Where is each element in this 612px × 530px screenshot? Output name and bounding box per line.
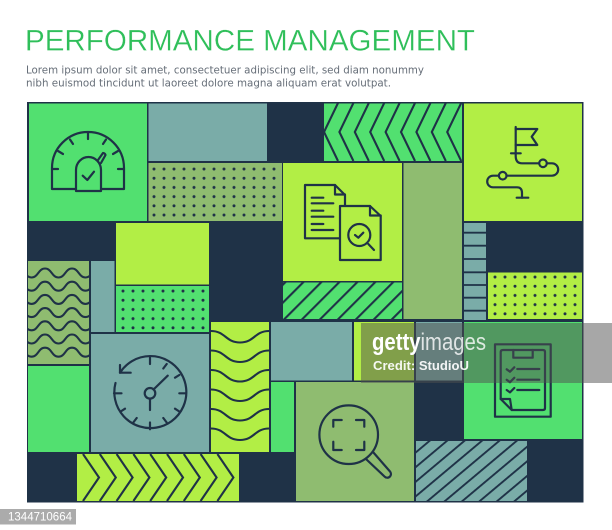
panel: teal small tile [416, 322, 462, 380]
panel: documents tile [283, 163, 402, 281]
subtitle text block [26, 64, 424, 90]
panel: mosaic background [27, 102, 584, 502]
subtitle text block: Lorem ipsum dolor sit amet, consectetuer adipiscing elit, sed diam nonummy [26, 64, 424, 76]
subtitle text block: nibh euismod tincidunt ut laoreet dolore magna aliquam erat volutpat. [26, 78, 391, 90]
panel: lime dotted tile [488, 272, 582, 319]
panel: teal narrow tile [91, 261, 114, 332]
image id label: 1344710664 [8, 512, 73, 524]
panel: teal middle tile [271, 322, 352, 380]
panel: teal striped tile [416, 441, 527, 501]
panel: green chevron tile [324, 103, 462, 161]
icon: clock with counter-clockwise arrow [114, 356, 186, 429]
panel: lime plain tile [116, 223, 209, 284]
title: PERFORMANCE MANAGEMENT [25, 24, 475, 58]
panel: clipboard tile [464, 322, 582, 439]
watermark credit: Credit: StudioU [373, 358, 469, 373]
icon: flag and route [487, 127, 558, 198]
panel: gauge tile [29, 104, 147, 221]
panel: magnifier tile [296, 382, 414, 501]
panel: lime chevron tile [77, 454, 239, 501]
panel: dotted olive tile [148, 163, 282, 221]
panel: roadmap flag tile [464, 104, 582, 221]
panel: green striped tile [283, 282, 402, 319]
panel: green lower-left tile [28, 366, 89, 452]
panel: lime small tile [354, 322, 414, 380]
panel: teal ladder tile [464, 223, 486, 320]
icon: magnifier with focus corners [319, 405, 391, 478]
icon: speedometer gauge [52, 132, 124, 191]
panel: green small tile [271, 382, 294, 452]
panel: clock tile [91, 334, 209, 452]
image id label [0, 509, 76, 524]
icon: checklist clipboard [495, 344, 551, 417]
panel: olive wave tile [28, 261, 89, 364]
panel: green dotted tile [116, 286, 209, 332]
panel: olive tall tile [404, 163, 462, 319]
panel: lime wave tile [211, 322, 269, 452]
watermark logo text: gettyimages [372, 329, 486, 356]
panel: teal tile [148, 104, 267, 161]
icon: documents with magnifier [305, 185, 381, 260]
watermark band [361, 323, 612, 383]
